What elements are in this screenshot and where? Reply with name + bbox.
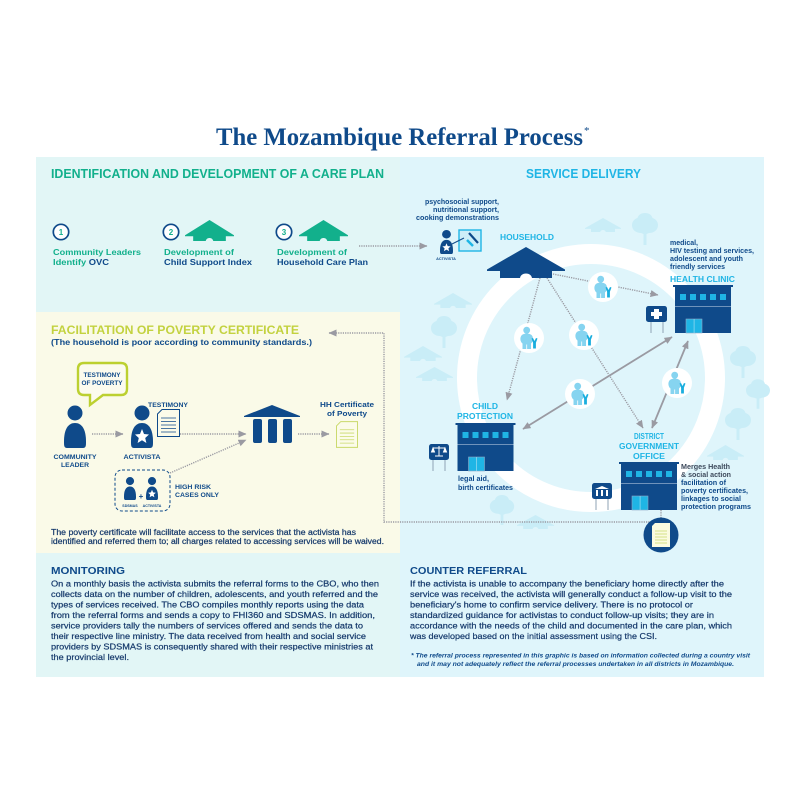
arrow: certificate feedback loop: [329, 333, 661, 522]
high risk cases box: SDSMAS: [122, 504, 138, 508]
footnote: * The referral process represented in this graphic is based on information collected during a country visit: [411, 652, 751, 660]
health clinic: HIV testing and services,: [670, 248, 754, 255]
child protection: [429, 402, 516, 492]
arrow: government to certificate: [298, 433, 329, 435]
service route arrows: [507, 274, 688, 429]
step 3: 3: [282, 228, 287, 237]
text block: counter referral: beneficiary's home to confirm service delivery. There is no protocol or: [410, 600, 693, 610]
icon: activista: [124, 406, 161, 461]
text block: monitoring: types of services received. The CBO compiles monthly reports using the data: [51, 600, 364, 610]
text block: monitoring: On a monthly basis the activista submits the referral forms to the CBO, who then: [51, 578, 379, 588]
text: poverty certificate note: [51, 528, 384, 546]
high risk cases box: HIGH RISK: [175, 484, 211, 491]
activista home services: nutritional support,: [433, 207, 499, 214]
text block: monitoring: the provincial level.: [51, 652, 129, 662]
HH certificate of poverty: HH Certificate: [320, 400, 374, 409]
step 3: Development of: [277, 247, 347, 257]
HH certificate of poverty: of Poverty: [327, 409, 368, 418]
district government office: GOVERNMENT: [619, 442, 679, 451]
icon: testimony document: TESTIMONY: [148, 402, 189, 409]
district government office: Merges Health: [681, 464, 730, 471]
text block: monitoring: from the referral forms and sends a copy to FHI360 and SDSMAS. In addition,: [51, 610, 375, 620]
child protection: birth certificates: [458, 485, 513, 492]
text block: counter referral: COUNTER REFERRAL: [410, 565, 528, 577]
district government office: [592, 432, 751, 511]
speech bubble: testimony of poverty: OF POVERTY: [82, 380, 123, 387]
icon: community leader: LEADER: [61, 462, 89, 469]
health clinic: friendly services: [670, 264, 725, 271]
household: HOUSEHOLD: [500, 233, 554, 242]
text block: counter referral: [409, 565, 732, 641]
district government office: DISTRICT: [634, 432, 664, 441]
icon: community leader: COMMUNITY: [54, 454, 97, 461]
heading: facilitation of poverty certificate: FACILITATION OF POVERTY CERTIFICATE: [51, 323, 299, 337]
arrow: care plan to activista: [359, 245, 427, 247]
title: *: [584, 125, 590, 137]
health clinic: HEALTH CLINIC: [670, 275, 735, 284]
HH certificate of poverty: [320, 400, 374, 447]
activista home services: ACTIVISTA: [436, 257, 456, 261]
step 1: Community Leaders: [53, 247, 141, 257]
household: [487, 233, 565, 278]
icon: activista: ACTIVISTA: [124, 454, 161, 461]
text block: monitoring: their respective line ministry. The data received from health and social service: [51, 631, 366, 641]
text block: counter referral: If the activista is unable to accompany the beneficiary home directly after the: [410, 578, 724, 588]
district government office: OFFICE: [633, 452, 665, 461]
activista home services: psychosocial support,: [425, 199, 499, 206]
step 1: Identify OVC: [53, 257, 109, 267]
step 1: [53, 224, 141, 267]
icon: medical sign: [646, 306, 667, 333]
high risk cases box: +: [139, 492, 144, 501]
icon: testimony document: [148, 402, 189, 436]
heading: service delivery: SERVICE DELIVERY: [526, 167, 642, 181]
icons: beneficiaries in transit: [514, 272, 692, 409]
step 2: Child Support Index: [164, 257, 252, 267]
step 3: [276, 220, 368, 267]
activista home services: [416, 199, 499, 261]
text: poverty certificate note: identified and referred them to; all charges related to accessing services will be waived.: [51, 537, 384, 546]
step 2: Development of: [164, 247, 234, 257]
health clinic: [646, 240, 754, 333]
health clinic: adolescent and youth: [670, 256, 743, 263]
panel: service delivery: [400, 157, 764, 677]
icon: government building: [244, 405, 300, 443]
district government office: facilitation of: [681, 480, 727, 487]
step 2: 2: [169, 228, 174, 237]
speech bubble: testimony of poverty: [78, 363, 127, 405]
panel: identification and care plan: [36, 157, 400, 677]
icon: government sign: [592, 483, 612, 510]
icon: community leader: [54, 406, 97, 469]
child protection: legal aid,: [458, 476, 489, 483]
text block: monitoring: MONITORING: [51, 565, 125, 577]
district government office: linkages to social: [681, 496, 741, 503]
health clinic: medical,: [670, 240, 698, 247]
text block: monitoring: service providers tally the numbers of services offered and sends the data to: [51, 620, 363, 630]
district government office: poverty certificates,: [681, 488, 748, 495]
high risk cases box: CASES ONLY: [175, 492, 220, 499]
child protection: CHILD: [472, 402, 498, 411]
speech bubble: testimony of poverty: TESTIMONY: [84, 372, 121, 379]
arrow: leader to activista: [92, 433, 123, 435]
activista home services: cooking demonstrations: [416, 215, 499, 222]
text block: monitoring: [51, 565, 379, 662]
panel: poverty certificate: [36, 312, 400, 553]
text block: counter referral: was developed based on the initial assessment using the CSI.: [409, 631, 657, 641]
district government office: & social action: [681, 472, 731, 479]
icon: scales of justice sign: [429, 444, 449, 471]
high risk cases box: ACTIVISTA: [143, 504, 162, 508]
icon: certificate document in circle: [644, 510, 678, 552]
step 3: Household Care Plan: [277, 257, 368, 267]
arrow: high risk to government: [170, 440, 246, 473]
footnote: [411, 652, 751, 668]
text block: counter referral: service was received, the activista will generally conduct a follow-up visit to the: [410, 589, 732, 599]
text block: counter referral: accordance with the needs of the child and documented in the care plan, which: [410, 620, 732, 630]
text block: monitoring: collects data on the number of children, adolescents, and youth referred and the: [51, 589, 378, 599]
title: The Mozambique Referral Process: [216, 124, 583, 151]
heading: facilitation of poverty certificate: (The household is poor according to community standards.): [51, 337, 312, 347]
text: poverty certificate note: The poverty certificate will facilitate access to the services that the activista has: [51, 528, 356, 537]
child protection: PROTECTION: [457, 412, 513, 421]
heading: facilitation of poverty certificate: [51, 323, 312, 347]
step 1: 1: [59, 228, 64, 237]
heading: identification: IDENTIFICATION AND DEVELOPMENT OF A CARE PLAN: [51, 167, 384, 181]
footnote: and it may not adequately reflect the referral processes undertaken in all districts in Mozambique.: [417, 661, 734, 668]
step 2: [163, 220, 252, 267]
arrow: testimony to government: [180, 433, 246, 435]
district government office: protection programs: [681, 504, 751, 511]
background scenery: ring, trees and houses: [404, 213, 770, 529]
high risk cases box: [115, 470, 220, 511]
text block: monitoring: providers by SDSMAS is consequently shared with their respective ministries at: [51, 642, 374, 652]
text block: counter referral: standardized guidance for activistas to conduct follow-up visits; they are in: [410, 610, 714, 620]
